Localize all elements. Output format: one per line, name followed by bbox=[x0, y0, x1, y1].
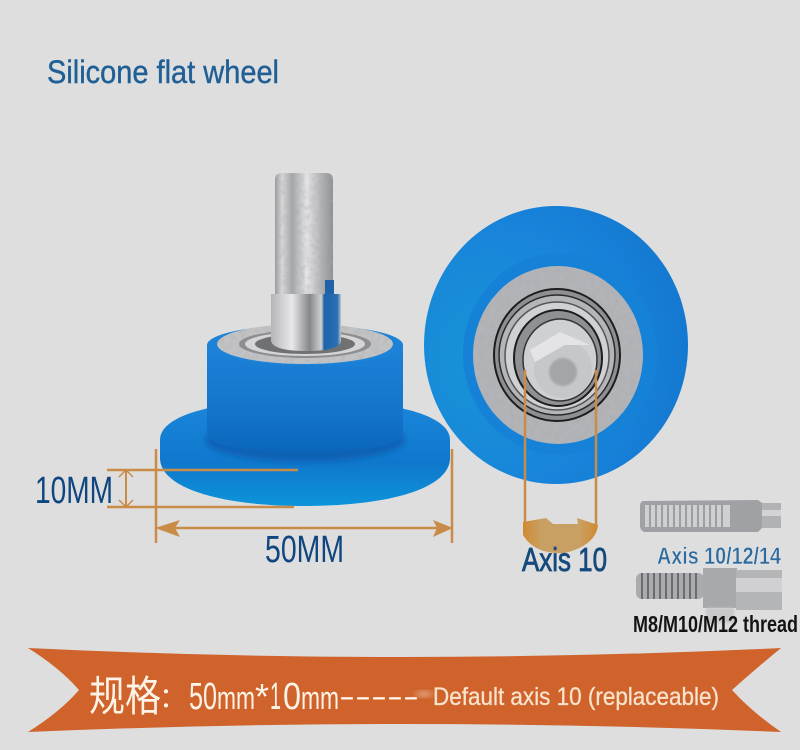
icon: threaded axis bbox=[636, 568, 782, 623]
banner spec text: 规格 bbox=[89, 663, 161, 724]
left wheel: side view bbox=[160, 173, 450, 506]
title: Silicone flat wheel bbox=[47, 54, 279, 90]
hub shadow bbox=[205, 418, 405, 462]
flange bbox=[160, 400, 450, 506]
dimension: 10mm height bbox=[35, 470, 298, 512]
banner size text: 50 bbox=[189, 676, 217, 718]
shaft collar bbox=[271, 294, 341, 351]
right wheel: front view bbox=[424, 206, 688, 484]
label: Axis 10: Axis 10 bbox=[522, 541, 607, 578]
label: 10MM: 10MM bbox=[35, 470, 113, 512]
banner bbox=[28, 648, 781, 732]
bearing rings bbox=[494, 289, 620, 421]
silver hub disc bbox=[473, 266, 643, 444]
shaft end bbox=[534, 340, 592, 398]
banner size text: 1 bbox=[270, 676, 281, 718]
outer wheel disc bbox=[424, 206, 688, 484]
icon: knurled axis bbox=[640, 500, 781, 532]
banner size text bbox=[189, 676, 419, 718]
hub top face bbox=[207, 325, 403, 365]
banner size text: * bbox=[255, 676, 269, 717]
banner size text: ----- bbox=[339, 680, 419, 713]
banner size text: 0 bbox=[283, 676, 301, 718]
banner size text: mm bbox=[217, 680, 255, 716]
dimension: axis 10 bbox=[522, 370, 607, 578]
dimension: 50mm width bbox=[155, 449, 453, 571]
label: 50MM: 50MM bbox=[265, 529, 344, 571]
hub cylinder bbox=[207, 345, 403, 452]
inner step bbox=[463, 253, 657, 455]
banner size text: mm bbox=[301, 680, 339, 716]
shaft bbox=[275, 173, 333, 294]
shaft keyway bbox=[325, 280, 334, 294]
bearing ring bbox=[217, 324, 393, 364]
banner default note: Default axis 10 (replaceable) bbox=[433, 683, 719, 711]
banner colon: ： bbox=[159, 676, 187, 716]
banner ribbon bbox=[28, 648, 781, 732]
